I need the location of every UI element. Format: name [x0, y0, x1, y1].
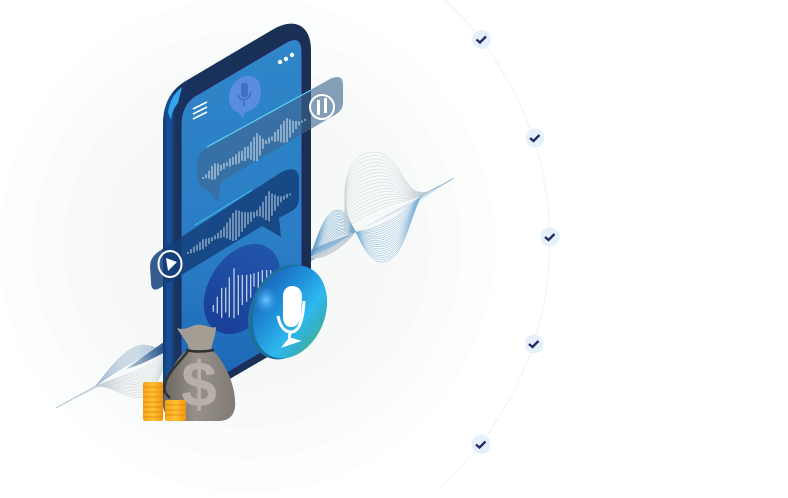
three dots menu: [278, 53, 294, 64]
check marker 5: [472, 435, 490, 454]
lower waveform: [188, 191, 290, 254]
phone body: [163, 24, 311, 412]
microphone button: [234, 253, 340, 371]
play button: [158, 251, 182, 277]
check marker 1: [472, 30, 491, 49]
dollar sign: $: [181, 348, 217, 420]
sound wave right: [310, 152, 454, 262]
screen: [181, 40, 302, 396]
tall coin stack: [143, 382, 163, 421]
pause button: [310, 95, 334, 119]
upper voice message bubble with pause control: [197, 77, 343, 203]
check marker 3: [540, 228, 560, 246]
microphone icon: [278, 286, 304, 345]
lower voice message bubble with play control: [150, 169, 299, 290]
side highlight: [168, 87, 182, 120]
money bag: [163, 325, 235, 421]
voice oval with waveform: [188, 230, 296, 348]
menu icon: [193, 102, 207, 119]
short coin stack: [165, 400, 186, 421]
coin stacks: [143, 382, 186, 421]
phone: [150, 24, 343, 412]
app logo speech bubble: [229, 76, 261, 118]
upper waveform: [203, 118, 305, 180]
sound wave left: [56, 341, 170, 408]
dotted timeline arc: [440, 0, 550, 487]
check marker 4: [524, 334, 544, 354]
check marker 2: [526, 128, 544, 148]
check markers: [472, 30, 560, 454]
background concentric circles: [0, 0, 495, 493]
